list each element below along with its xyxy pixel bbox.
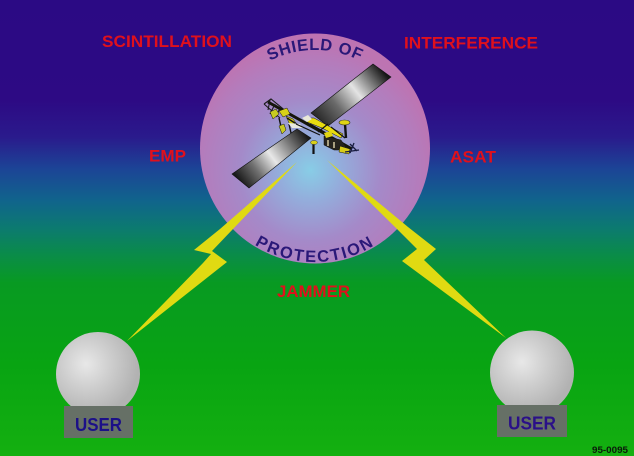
threat label: interference: INTERFERENCE [404, 34, 538, 52]
satellite [232, 64, 391, 188]
antenna dish: lower [310, 140, 318, 154]
right user terminal [490, 330, 574, 437]
user label: left: USER [75, 415, 122, 435]
sphere: right [490, 330, 574, 414]
lightning bolt: right [327, 160, 506, 338]
antenna dish: upper right [339, 120, 350, 138]
satellite truss [264, 99, 359, 154]
threat label: jammer: JAMMER [277, 283, 350, 301]
threat label: emp: EMP [149, 148, 186, 166]
user box: right [497, 405, 567, 437]
threat label: asat: ASAT [450, 148, 496, 166]
heading: shield of: SHIELD OF [267, 38, 364, 60]
sphere: left [56, 332, 140, 416]
lightning bolt: left [127, 162, 297, 341]
shield disc [200, 34, 430, 264]
threat label: scintillation: SCINTILLATION [102, 33, 232, 51]
figure number: 95-0095 [592, 445, 629, 456]
user box: left [64, 406, 133, 438]
solar panel: upper [311, 64, 391, 126]
left user terminal [56, 332, 140, 438]
heading: protection: PROTECTION [256, 236, 373, 262]
user label: right: USER [508, 414, 556, 434]
solar panel: lower [232, 129, 311, 188]
